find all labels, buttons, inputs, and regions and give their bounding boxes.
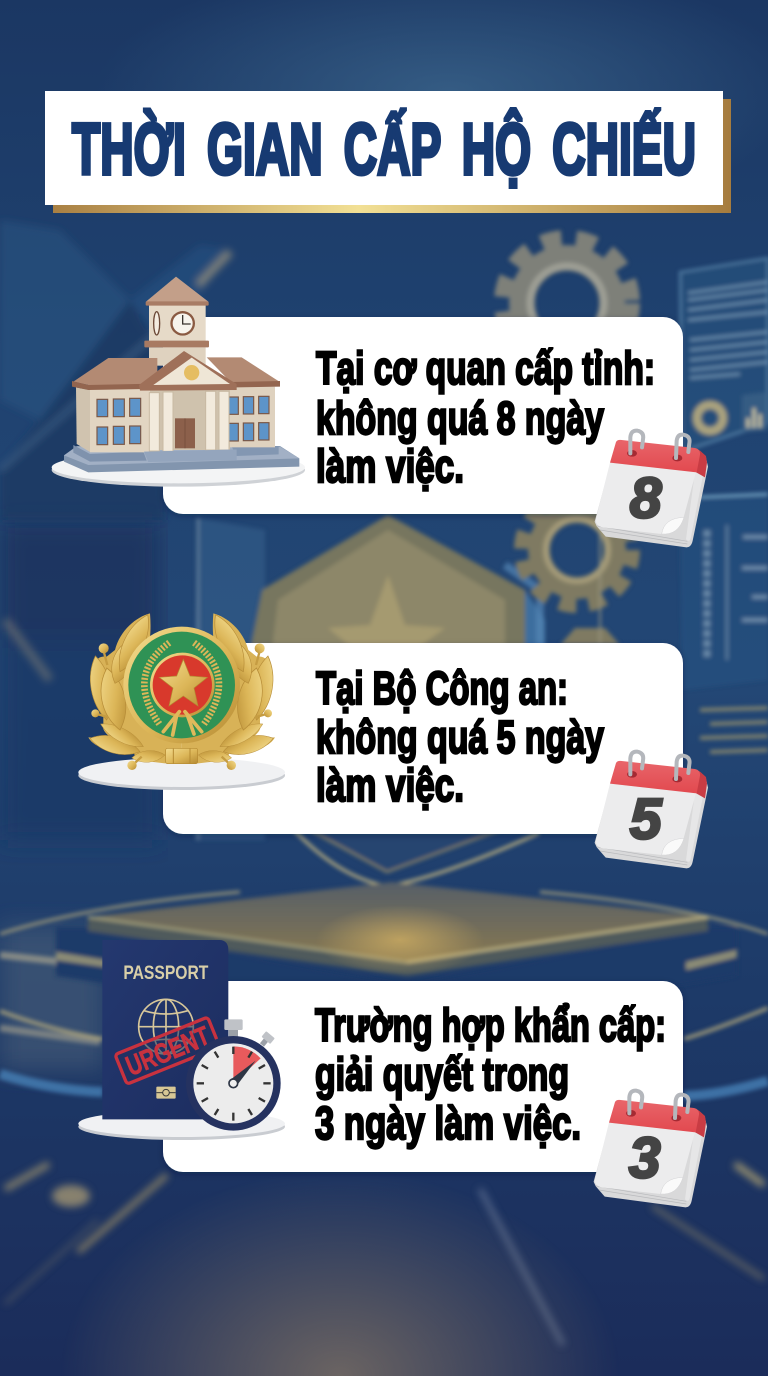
- text: urgent case time: 3 ngày làm việc.: [315, 1097, 581, 1149]
- icon: urgent passport with stopwatch: [78, 940, 285, 1140]
- panel: provincial agency: [163, 317, 683, 514]
- icon: government building: [52, 277, 305, 487]
- text: urgent case time: giải quyết trong: [315, 1048, 569, 1100]
- icon: police emblem: [78, 610, 285, 790]
- text: provincial agency time: [316, 342, 655, 492]
- text: provincial agency time: Tại cơ quan cấp tỉnh:: [316, 342, 655, 394]
- text: ministry time: Tại Bộ Công an:: [316, 662, 568, 714]
- icon: urgent passport with stopwatch: PASSPORT: [123, 963, 208, 984]
- text: urgent case time: [315, 999, 666, 1149]
- icon: urgent passport with stopwatch: URGENT: [122, 1020, 214, 1082]
- icon: calendar 8: [595, 431, 707, 547]
- icon: calendar 3: 3: [629, 1126, 661, 1190]
- icon: calendar 8: 8: [630, 466, 662, 530]
- text: ministry time: [316, 662, 604, 811]
- text: provincial agency time: làm việc.: [316, 440, 464, 492]
- text: ministry time: không quá 5 ngày: [316, 711, 604, 763]
- icon: calendar 3: [594, 1091, 706, 1207]
- title banner: [45, 91, 731, 213]
- icon: calendar 5: [595, 752, 707, 868]
- panel: urgent case: [163, 981, 683, 1172]
- icon: calendar 5: 5: [630, 787, 663, 851]
- panel: ministry of public security: [163, 643, 683, 834]
- text: ministry time: làm việc.: [316, 759, 464, 811]
- text: provincial agency time: không quá 8 ngày: [316, 392, 604, 444]
